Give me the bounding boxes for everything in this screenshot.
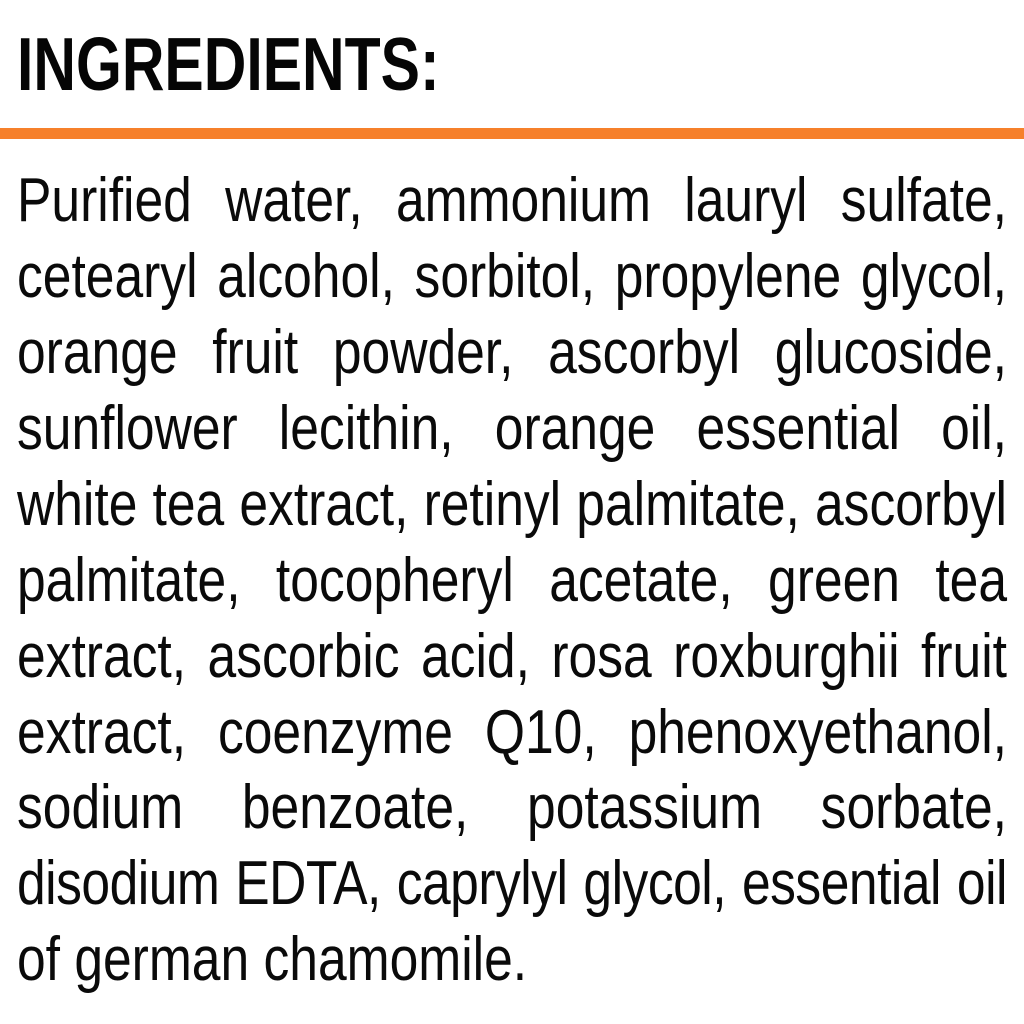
ingredients list text: white tea extract, retinyl palmitate, ascorbyl [17, 469, 1007, 539]
ingredients list text: disodium EDTA, caprylyl glycol, essential oil [17, 848, 1007, 918]
ingredients list text: extract, coenzyme Q10, phenoxyethanol, [17, 697, 1007, 767]
ingredients list text [16, 165, 1008, 994]
ingredients list text: sunflower lecithin, orange essential oil, [17, 393, 1007, 463]
ingredients list text: orange fruit powder, ascorbyl glucoside, [17, 317, 1007, 387]
ingredients list text: sodium benzoate, potassium sorbate, [17, 772, 1007, 842]
ingredients list text: of german chamomile. [17, 924, 527, 994]
ingredients list text: extract, ascorbic acid, rosa roxburghii fruit [17, 621, 1007, 691]
ingredients list text: Purified water, ammonium lauryl sulfate, [17, 165, 1007, 235]
ingredients list text: palmitate, tocopheryl acetate, green tea [17, 545, 1007, 615]
title: INGREDIENTS: [17, 23, 440, 107]
ingredients list text: cetearyl alcohol, sorbitol, propylene glycol, [17, 241, 1007, 311]
orange divider bar [0, 128, 1024, 139]
